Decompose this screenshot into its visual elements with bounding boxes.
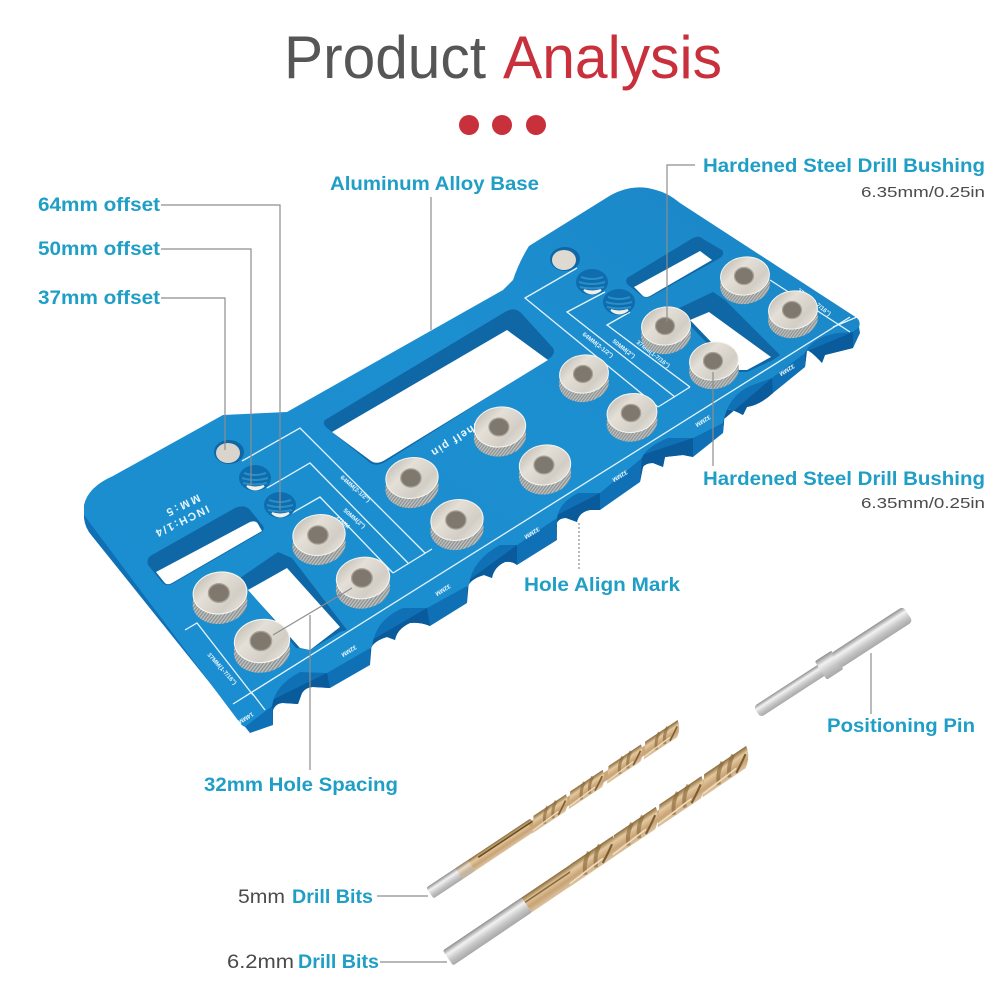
engraved text: 32MM [694, 413, 711, 427]
label: lower bushing: 6.35mm/0.25in [861, 495, 985, 512]
label: 5mm drill bits [238, 887, 373, 908]
drill bit 6.2mm [443, 746, 756, 966]
engraved text: 50MM(2") [611, 339, 636, 360]
engraved text: 64MM(2-1/2") [339, 475, 371, 504]
engraved text: 32MM [340, 643, 357, 657]
engraved text: 37MM(1-7/16") [206, 652, 237, 686]
engraved guide lines [185, 268, 857, 710]
label: 32mm hole spacing: 32mm Hole Spacing [204, 775, 398, 796]
engraved text: MM:5 [164, 491, 202, 518]
leader lines [161, 165, 871, 962]
label: 37mm offset: 37mm offset [38, 288, 161, 309]
engraved text: 37MM [334, 515, 350, 530]
engraved text: 32MM [611, 468, 628, 482]
pin right [550, 247, 580, 271]
label: 6.2mm drill bits: Drill Bits [298, 952, 379, 973]
title: Product [284, 24, 486, 91]
engraved text: 32MM [778, 362, 795, 376]
three red dots [459, 115, 546, 135]
label: lower bushing: Hardened Steel Drill Bushing [703, 469, 985, 490]
positioning pin [751, 605, 914, 721]
large window [324, 309, 554, 465]
label: lower bushing [703, 469, 985, 512]
label: 5mm drill bits: 5mm [238, 887, 285, 908]
engraved text: 32MM [434, 582, 451, 596]
left slot [148, 506, 264, 585]
label: top bushing [703, 156, 985, 201]
drill bit 5mm [426, 720, 685, 899]
engraved text: 37MM(1-7/16") [635, 340, 670, 370]
engraved text: 14MM [237, 710, 254, 724]
label: hole align mark: Hole Align Mark [524, 575, 680, 596]
title [284, 24, 722, 91]
engraved text [153, 288, 831, 724]
engraved text: 64MM(2-1/2") [581, 332, 614, 359]
scallop shading [272, 332, 853, 725]
plate thickness [84, 327, 860, 733]
right window [675, 292, 780, 372]
label: 6.2mm drill bits [227, 952, 379, 973]
threaded holes [239, 269, 635, 518]
engraved text: 50MM(2") [342, 508, 366, 530]
label: 50mm offset: 50mm offset [38, 239, 161, 260]
pin left [214, 440, 244, 464]
label: positioning pin: Positioning Pin [827, 716, 975, 737]
engraved text: 37MM(1-7/16") [796, 288, 831, 318]
label: aluminum alloy base: Aluminum Alloy Base [330, 174, 539, 195]
bushings [190, 254, 820, 676]
label: top bushing: Hardened Steel Drill Bushing [703, 156, 985, 177]
jig plate [84, 187, 860, 733]
label: 5mm drill bits: Drill Bits [292, 887, 373, 908]
label: top bushing: 6.35mm/0.25in [861, 184, 985, 201]
right slot [626, 237, 723, 298]
plate top surface [84, 187, 860, 727]
title: Analysis [503, 24, 722, 91]
label: 64mm offset: 64mm offset [38, 195, 161, 216]
engraved text: shelf pin [429, 418, 483, 458]
engraved text: 32MM [523, 525, 540, 539]
left window [240, 552, 347, 650]
label: 6.2mm drill bits: 6.2mm [227, 952, 294, 973]
engraved text: INCH:1/4 [153, 502, 211, 539]
